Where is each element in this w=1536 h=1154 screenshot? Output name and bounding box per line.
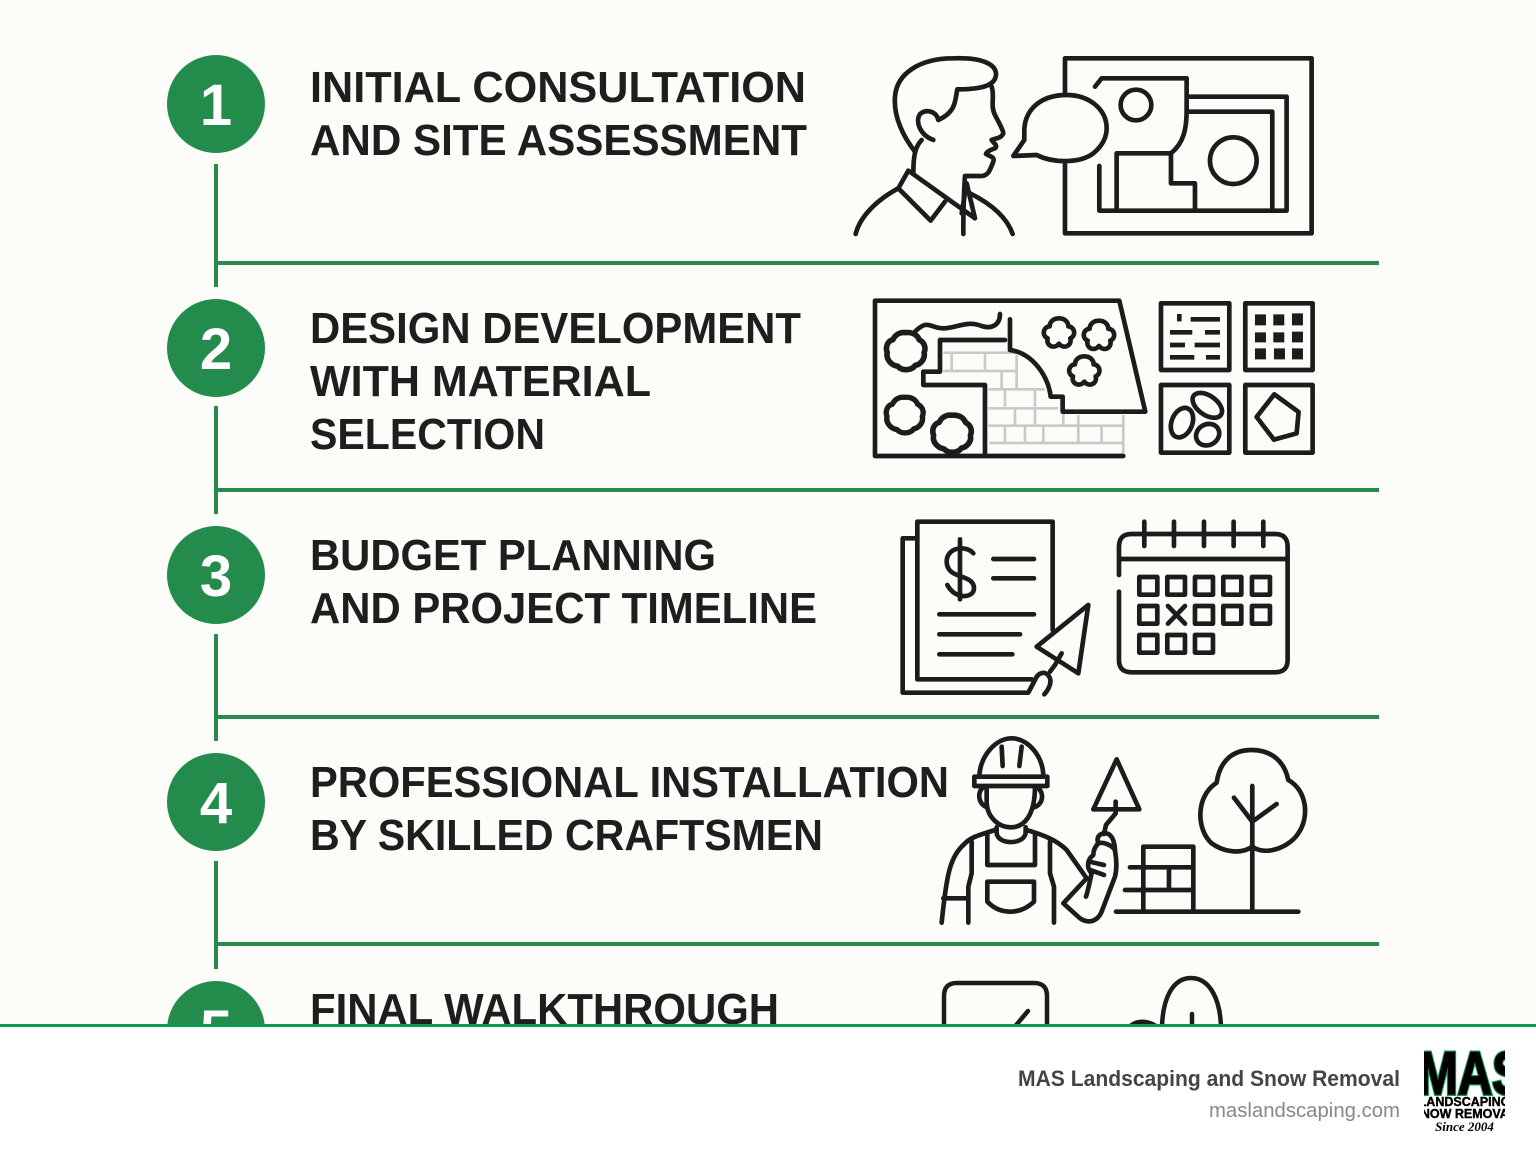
logo: Since 2004 — [1435, 1119, 1494, 1134]
step 1 number badge — [167, 55, 265, 153]
icon: craftsman with trowel, bricks and tree — [942, 738, 1305, 923]
step 1 heading: AND SITE ASSESSMENT — [310, 116, 807, 165]
step 1 heading — [310, 63, 807, 165]
step 4 heading — [310, 758, 949, 860]
step 1 — [167, 55, 1312, 234]
step 1 heading: INITIAL CONSULTATION — [310, 63, 806, 112]
step 3 number badge — [167, 526, 265, 624]
footer band — [0, 1024, 1536, 1154]
step 5 (cropped by footer) — [167, 978, 1221, 1079]
step 3 number badge: 3 — [200, 544, 232, 609]
step 4 number badge — [167, 753, 265, 851]
icon: landscape plan and material swatches — [875, 301, 1313, 456]
step 4 — [167, 738, 1305, 923]
footer website: maslandscaping.com — [1209, 1100, 1400, 1122]
step 2 heading: SELECTION — [310, 410, 545, 459]
step 3 — [167, 522, 1288, 694]
step 2 number badge — [167, 299, 265, 397]
step 4 heading: BY SKILLED CRAFTSMEN — [310, 811, 823, 860]
icon: consultation with site plan — [856, 58, 1312, 234]
step 1 number badge: 1 — [200, 73, 232, 138]
icon: checklist and tree, cropped — [944, 978, 1221, 1030]
step 5 heading: FINAL WALKTHROUGH — [310, 985, 779, 1034]
step 2 number badge: 2 — [200, 317, 232, 382]
logo: LANDSCAPING — [1419, 1095, 1510, 1109]
step 3 heading: AND PROJECT TIMELINE — [310, 584, 817, 633]
footer company name: MAS Landscaping and Snow Removal — [1018, 1066, 1400, 1091]
step 2 heading: DESIGN DEVELOPMENT — [310, 304, 801, 353]
step 2 — [167, 299, 1313, 459]
step 3 heading — [310, 531, 817, 633]
step 3 heading: BUDGET PLANNING — [310, 531, 716, 580]
logo — [1413, 1040, 1524, 1134]
step 5 number badge: 5 — [200, 999, 232, 1064]
logo: SNOW REMOVAL — [1413, 1107, 1517, 1121]
icon: budget document, trowel and calendar — [903, 522, 1288, 694]
step 4 heading: PROFESSIONAL INSTALLATION — [310, 758, 949, 807]
step 5 number badge — [167, 981, 265, 1079]
step 4 number badge: 4 — [200, 771, 232, 836]
step 2 heading: WITH MATERIAL — [310, 357, 651, 406]
step 2 heading — [310, 304, 801, 459]
